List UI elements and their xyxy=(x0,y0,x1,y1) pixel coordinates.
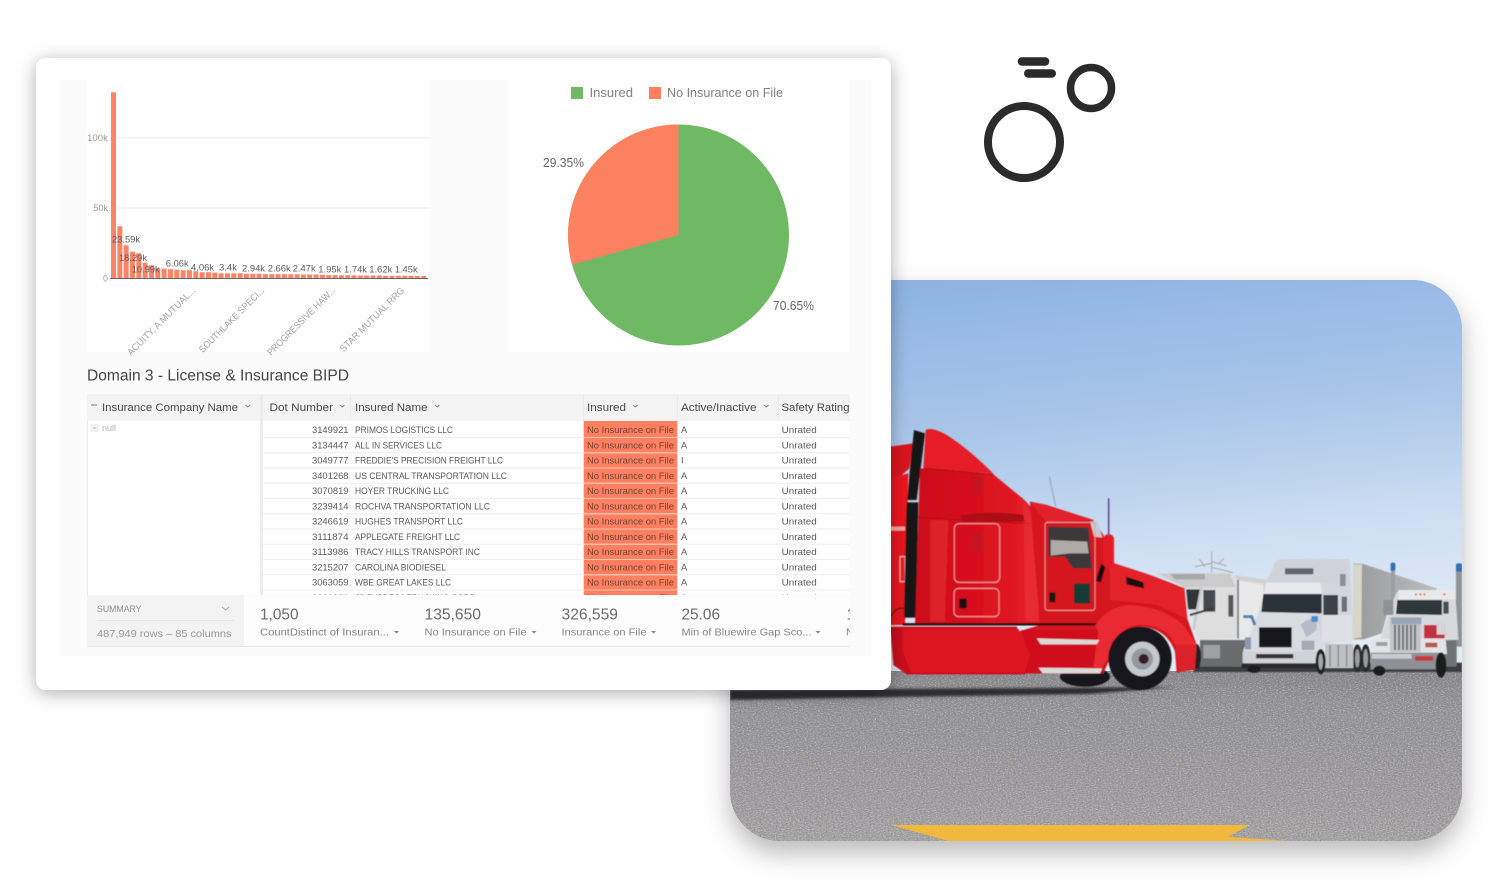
table rows: No Insurance on File xyxy=(587,593,674,603)
table rows: FREDDIE'S PRECISION FREIGHT LLC xyxy=(355,456,503,466)
table rows: No Insurance on File xyxy=(587,562,674,572)
panel: bar chart xyxy=(86,80,430,358)
table rows: TRACY HILLS TRANSPORT INC xyxy=(355,547,480,557)
summary metrics: Min of Bluewire Gap Sco... xyxy=(682,626,812,638)
table rows: 3246619 xyxy=(312,516,348,526)
table rows: I xyxy=(681,456,684,466)
photo: trucks in parking lot xyxy=(730,280,1462,842)
table rows: Unrated xyxy=(782,516,817,526)
table rows: No Insurance on File xyxy=(587,547,674,557)
table rows: HUGHES TRANSPORT LLC xyxy=(355,516,463,526)
pie labels xyxy=(543,156,814,313)
x axis labels: STAR MUTUAL RRG xyxy=(338,285,407,355)
y axis labels: 0 xyxy=(103,274,108,284)
table rows: No Insurance on File xyxy=(587,532,674,542)
pie labels: 70.65% xyxy=(773,299,814,313)
data labels: 6.06k xyxy=(166,258,189,269)
table rows: Unrated xyxy=(782,456,817,466)
table rows: No Insurance on File xyxy=(587,516,674,526)
table header: Insured xyxy=(587,402,626,414)
table rows: 3111874 xyxy=(312,532,348,542)
table rows: 3113986 xyxy=(312,547,348,557)
data labels: 23.59k xyxy=(112,234,140,245)
panel: pie chart xyxy=(507,80,850,352)
table rows: ROCHVA TRANSPORTATION LLC xyxy=(355,501,490,511)
summary metrics: 326,559 xyxy=(562,606,618,624)
table rows: Unrated xyxy=(782,532,817,542)
summary metrics: 1 xyxy=(846,606,856,624)
table rows: A xyxy=(681,516,688,526)
data labels: 1.62k xyxy=(369,264,393,275)
summary metrics: No Insurance on File xyxy=(424,626,527,638)
data labels: 1.74k xyxy=(344,264,367,275)
table header: Safety Rating xyxy=(782,402,850,414)
data labels: 2.47k xyxy=(293,263,316,274)
table rows: Unrated xyxy=(782,562,817,572)
table rows: A xyxy=(681,547,688,557)
summary metrics: Insurance on File xyxy=(562,626,647,638)
table rows: Unrated xyxy=(782,471,817,481)
table rows xyxy=(263,421,850,603)
bars xyxy=(111,92,426,278)
legend: Insured xyxy=(590,86,633,100)
table rows: 3049777 xyxy=(312,456,348,466)
table rows: A xyxy=(681,593,688,603)
x axis labels: SOUTHLAKE SPECI... xyxy=(197,285,267,355)
table header xyxy=(87,394,850,421)
table rows: ALL IN SERVICES LLC xyxy=(355,440,442,450)
summary metrics xyxy=(260,608,850,638)
table rows: Unrated xyxy=(782,486,817,496)
table rows: APPLEGATE FREIGHT LLC xyxy=(355,532,460,542)
table header: Insurance Company Name xyxy=(102,402,238,414)
table rows: No Insurance on File xyxy=(587,501,674,511)
table rows: Unrated xyxy=(782,501,817,511)
table rows: Unrated xyxy=(782,547,817,557)
table rows: 3149921 xyxy=(312,425,348,435)
table rows: Unrated xyxy=(782,593,817,603)
data labels: 2.94k xyxy=(242,263,265,274)
table rows: No Insurance on File xyxy=(587,425,674,435)
panel: dashboard card xyxy=(36,58,891,690)
table rows: Unrated xyxy=(782,578,817,588)
table rows: 3061001 xyxy=(312,593,348,603)
x axis labels: ACUITY, A MUTUAL... xyxy=(125,285,198,358)
legend xyxy=(571,86,783,100)
table rows: No Insurance on File xyxy=(587,578,674,588)
table rows: WBE GREAT LAKES LLC xyxy=(355,578,451,588)
summary metrics: 135,650 xyxy=(424,606,481,624)
y axis labels xyxy=(87,133,109,284)
table rows: A xyxy=(681,562,688,572)
data labels: 2.66k xyxy=(268,263,291,274)
table rows: 3401268 xyxy=(312,471,348,481)
table header: Dot Number xyxy=(270,402,333,414)
summary bar: 487,949 rows – 85 columns xyxy=(97,628,232,640)
table rows: A xyxy=(681,440,688,450)
table rows: A xyxy=(681,471,688,481)
table rows: No Insurance on File xyxy=(587,456,674,466)
data labels: 10.99k xyxy=(132,264,160,275)
summary metrics: 1,050 xyxy=(260,606,299,624)
legend: No Insurance on File xyxy=(667,86,783,100)
row group column: null xyxy=(102,423,116,433)
pie labels: 29.35% xyxy=(543,156,584,170)
table rows: 3063059 xyxy=(312,578,348,588)
y axis labels: 50k xyxy=(93,203,108,213)
table rows: Unrated xyxy=(782,425,817,435)
x axis labels xyxy=(125,285,407,358)
table rows: Unrated xyxy=(782,440,817,450)
summary metrics: N xyxy=(846,626,854,638)
summary bar xyxy=(87,595,856,646)
table header: Active/Inactive xyxy=(681,402,756,414)
y axis labels: 100k xyxy=(87,133,109,143)
heading: domain title: Domain 3 - License & Insurance BIPD xyxy=(87,368,349,384)
table rows: 3215207 xyxy=(312,562,348,572)
table rows: A xyxy=(681,501,688,511)
data labels: 1.45k xyxy=(395,264,418,275)
table rows: A xyxy=(681,578,688,588)
row group column xyxy=(87,394,263,595)
table header: Insured Name xyxy=(355,402,428,414)
table rows: 3134447 xyxy=(312,440,348,450)
table rows: No Insurance on File xyxy=(587,440,674,450)
table rows: CAROLINA BIODIESEL xyxy=(355,562,446,572)
summary bar: SUMMARY xyxy=(97,604,142,614)
table rows: 3239414 xyxy=(312,501,348,511)
pie slices xyxy=(568,124,789,346)
icon: circles and dashes xyxy=(988,57,1112,178)
table rows: A xyxy=(681,425,688,435)
table rows: PRIMOS LOGISTICS LLC xyxy=(355,425,453,435)
table rows: HOYER TRUCKING LLC xyxy=(355,486,449,496)
table rows: A xyxy=(681,532,688,542)
table rows: No Insurance on File xyxy=(587,486,674,496)
table rows: 3070819 xyxy=(312,486,348,496)
data labels: 3.4k xyxy=(219,262,237,273)
summary metrics: 25.06 xyxy=(682,606,720,624)
data labels: 18.29k xyxy=(119,253,147,264)
x axis labels: PROGRESSIVE HAW... xyxy=(265,285,338,358)
table rows: US CENTRAL TRANSPORTATION LLC xyxy=(355,471,507,481)
table rows: JS EXPRESS TRUCKING CORP xyxy=(355,593,475,603)
data labels: 4.06k xyxy=(191,262,214,273)
table rows: No Insurance on File xyxy=(587,471,674,481)
data labels: 1.95k xyxy=(318,264,342,275)
data labels xyxy=(112,234,418,275)
summary metrics: CountDistinct of Insuran... xyxy=(260,626,389,638)
table rows: A xyxy=(681,486,688,496)
table xyxy=(87,394,856,646)
